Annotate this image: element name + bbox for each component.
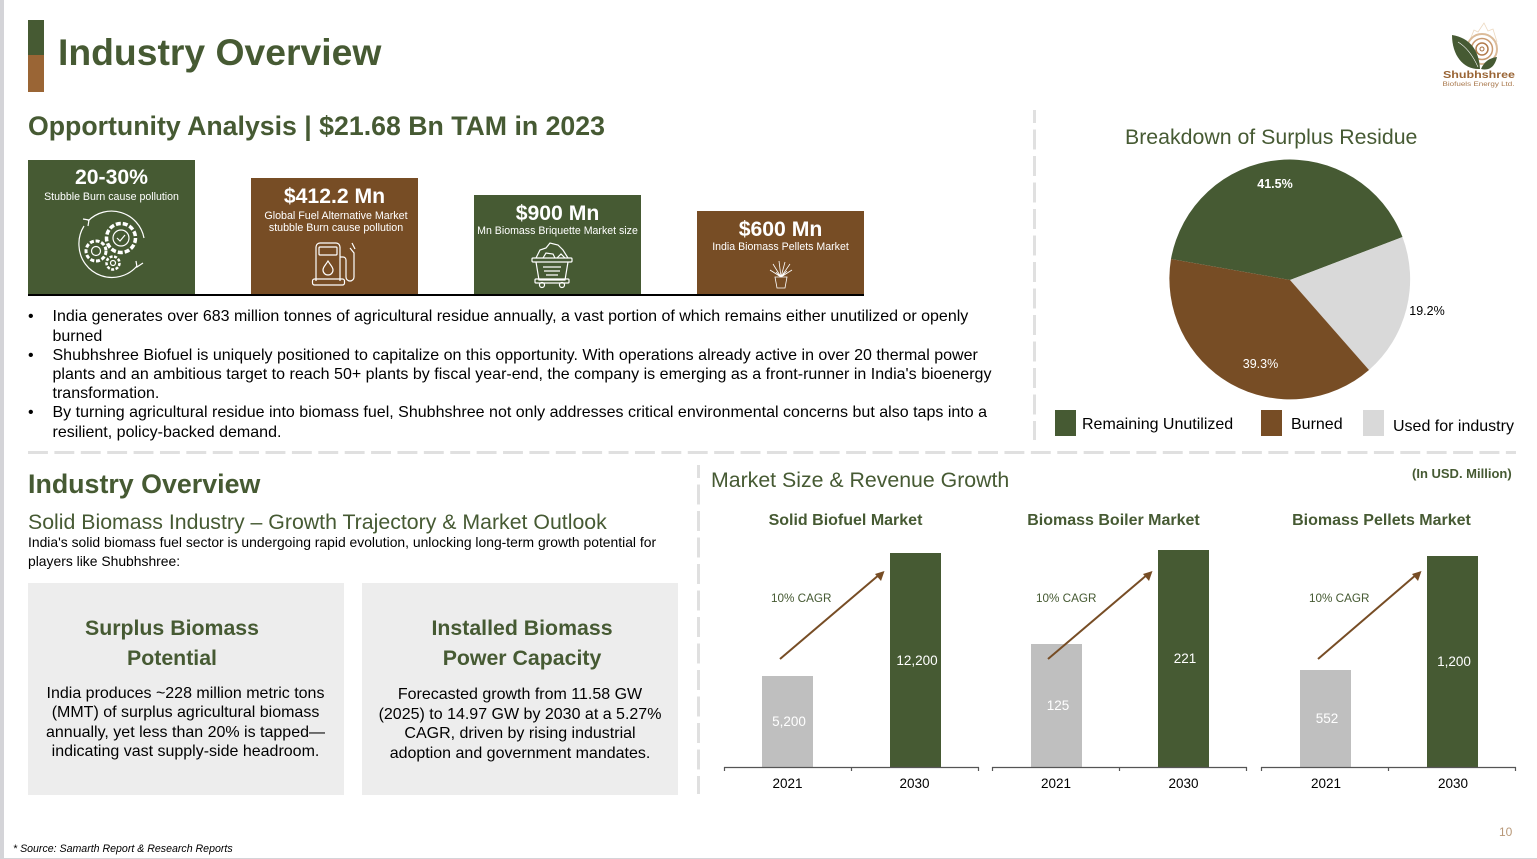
stat card: $600 Mn — [697, 211, 864, 294]
bar 2030 — [1427, 556, 1478, 767]
axis and arrow — [1260, 571, 1516, 771]
year 2030: 2030 — [899, 776, 930, 791]
panel text — [46, 684, 325, 760]
logo: Shubhshree Biofuels — [1442, 22, 1516, 88]
bullet list: • — [28, 308, 34, 325]
panel text — [379, 686, 661, 762]
year 2021: 2021 — [772, 776, 803, 791]
icon: potted plant — [770, 261, 792, 288]
lower section intro: players like Shubhshree: — [28, 553, 180, 569]
bar 2021 — [1031, 644, 1082, 767]
value 2030: 1,200 — [1437, 654, 1471, 669]
year 2030: 2030 — [1438, 776, 1468, 791]
cagr label: 10% CAGR — [1309, 592, 1369, 605]
stat value: 20-30% — [75, 166, 148, 189]
bullet list: Shubhshree Biofuel is uniquely positioned to capitalize on this opportunity. With operations already active in over 20 thermal power — [52, 347, 978, 364]
axis and arrow — [992, 571, 1248, 771]
stat card: $900 Mn — [474, 195, 641, 294]
stat caption: stubble Burn cause pollution — [269, 222, 403, 234]
logo: Shubhshree Biofuels: Shubhshree — [1443, 70, 1516, 81]
value 2030: 221 — [1174, 651, 1196, 666]
bar chart: solid biofuel market — [724, 512, 980, 791]
stat caption: Stubble Burn cause pollution — [44, 191, 179, 203]
bar 2030 — [890, 553, 941, 767]
pie chart: surplus residue — [1169, 160, 1445, 400]
pie chart: surplus residue: 19.2% — [1409, 304, 1445, 318]
bar chart: biomass pellets market — [1260, 512, 1516, 791]
bullet list: By turning agricultural residue into biomass fuel, Shubhshree not only addresses critical environmental concerns but also taps into a — [52, 404, 987, 421]
panel text: adoption and government mandates. — [390, 745, 650, 762]
bar 2021 — [1300, 670, 1351, 767]
bullet list: India generates over 683 million tonnes of agricultural residue annually, a vast portion of which remains either unutilized or openly — [52, 308, 968, 325]
pie chart: surplus residue: 39.3% — [1243, 357, 1278, 371]
panel heading: Power Capacity — [443, 646, 601, 670]
bullet list: plants and an ambitious target to reach 50+ plants by fiscal year-end, the company is emerging as a front-runner in India's bioenergy — [52, 366, 991, 383]
value 2021: 125 — [1047, 698, 1069, 713]
panel text: CAGR, driven by rising industrial — [404, 725, 636, 742]
bullet list: • — [28, 404, 34, 421]
stat caption: Global Fuel Alternative Market — [264, 210, 408, 222]
stat value: $900 Mn — [516, 202, 599, 225]
icon: gears in cycle — [78, 210, 145, 278]
panel text: India produces ~228 million metric tons — [47, 684, 324, 702]
panel heading — [431, 616, 613, 670]
bullet list: transformation. — [52, 385, 159, 402]
panel: surplus biomass potential — [28, 583, 344, 795]
pie chart: surplus residue: 41.5% — [1257, 177, 1293, 191]
year 2021: 2021 — [1041, 776, 1071, 791]
icon: fuel pump — [312, 242, 356, 286]
stat caption: Mn Biomass Briquette Market size — [477, 225, 638, 237]
stat caption: India Biomass Pellets Market — [712, 241, 849, 253]
panel heading: Surplus Biomass — [85, 616, 259, 640]
page title: Industry Overview — [58, 31, 381, 73]
axis and arrow — [724, 571, 980, 771]
panel text: (2025) to 14.97 GW by 2030 at a 5.27% — [379, 706, 661, 723]
section heading: opportunity analysis: Opportunity Analysis | $21.68 Bn TAM in 2023 — [28, 111, 605, 141]
bullet list: burned — [52, 328, 102, 345]
bullet list: resilient, policy-backed demand. — [52, 424, 281, 441]
year 2030: 2030 — [1168, 776, 1199, 791]
lower section subheading: Solid Biomass Industry – Growth Trajectory & Market Outlook — [28, 510, 607, 534]
pie legend: Burned — [1291, 416, 1343, 432]
panel heading: Installed Biomass — [431, 616, 613, 640]
pie legend: Used for industry — [1393, 418, 1514, 434]
value 2021: 5,200 — [772, 714, 806, 729]
source note: * Source: Samarth Report & Research Reports — [13, 843, 233, 855]
panel text: (MMT) of surplus agricultural biomass — [52, 704, 319, 721]
chart title: Solid Biofuel Market — [769, 512, 922, 529]
stat card: $412.2 Mn — [251, 178, 418, 294]
bullet list — [28, 308, 992, 441]
value 2021: 552 — [1316, 711, 1338, 726]
panel heading: Potential — [127, 646, 217, 670]
pie chart heading: Breakdown of Surplus Residue — [1125, 125, 1417, 149]
year 2021: 2021 — [1311, 776, 1341, 791]
pie legend: Remaining Unutilized — [1082, 416, 1233, 432]
panel text: indicating vast supply-side headroom. — [52, 743, 319, 760]
chart title: Biomass Boiler Market — [1027, 512, 1200, 529]
market size heading: Market Size & Revenue Growth — [711, 468, 1009, 492]
stat caption — [264, 210, 408, 234]
lower section intro: India's solid biomass fuel sector is undergoing rapid evolution, unlocking long-term growth potential for — [28, 534, 656, 550]
pie legend — [1055, 410, 1514, 436]
bar 2021 — [762, 676, 813, 767]
unit note: (In USD. Million) — [1412, 466, 1512, 481]
value 2030: 12,200 — [896, 653, 938, 668]
cagr label: 10% CAGR — [771, 592, 831, 605]
panel heading — [85, 616, 259, 670]
panel text: Forecasted growth from 11.58 GW — [398, 686, 642, 703]
lower section heading: Industry Overview — [28, 469, 260, 499]
stat cards baseline — [28, 294, 864, 296]
cagr label: 10% CAGR — [1036, 592, 1096, 605]
panel text: annually, yet less than 20% is tapped— — [46, 724, 325, 740]
icon: biomass cart — [531, 242, 573, 288]
bullet list: • — [28, 347, 34, 364]
title accent bar — [28, 20, 44, 92]
stat value: $412.2 Mn — [284, 185, 385, 208]
bar chart: biomass boiler market — [992, 512, 1248, 791]
lower section intro — [28, 534, 656, 569]
chart title: Biomass Pellets Market — [1292, 512, 1471, 529]
bar 2030 — [1158, 550, 1209, 767]
stat card: 20-30% — [28, 160, 195, 294]
stat value: $600 Mn — [739, 218, 822, 241]
logo: Shubhshree Biofuels: Biofuels Energy Ltd. — [1442, 82, 1515, 88]
page number: 10 — [1499, 825, 1512, 839]
panel: installed biomass power capacity — [362, 583, 678, 795]
